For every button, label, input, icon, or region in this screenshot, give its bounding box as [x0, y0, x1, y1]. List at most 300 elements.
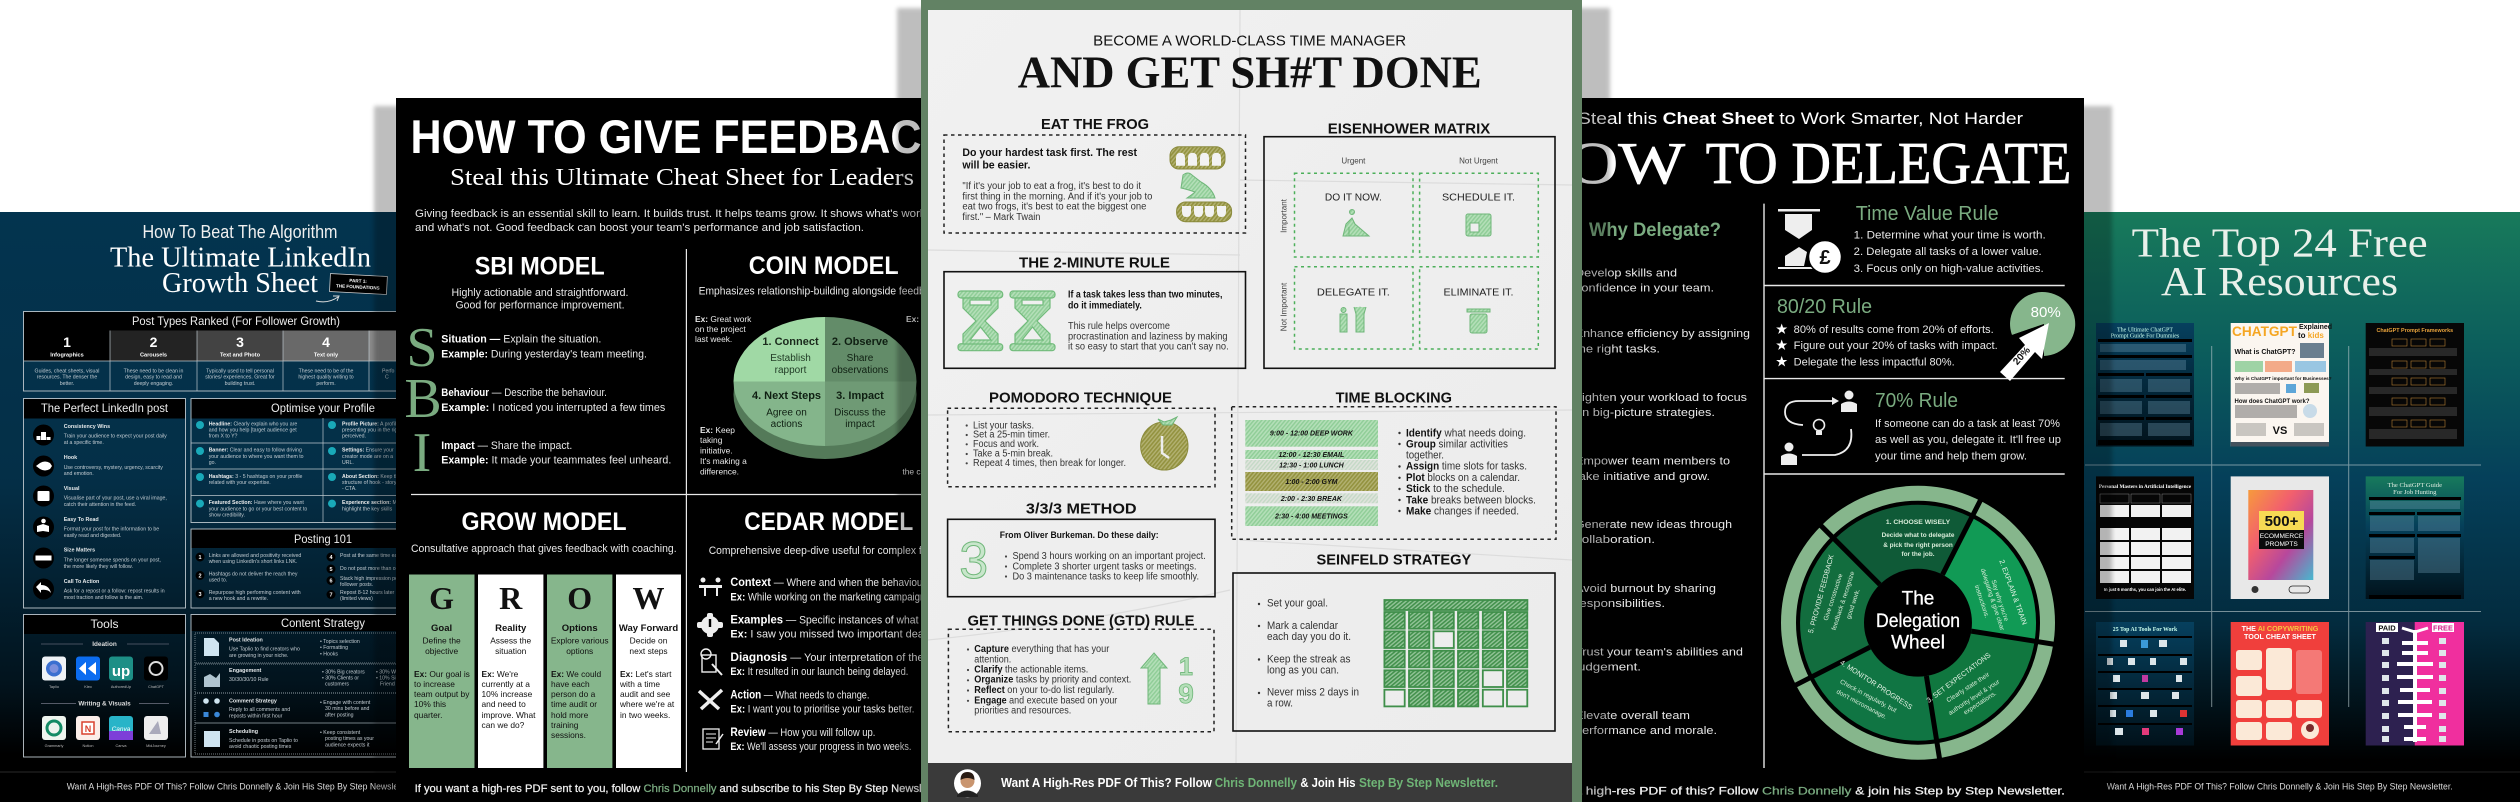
column: reality: Ex: We're	[482, 669, 519, 679]
segment: monitor progress: 4. MONITOR PROGRESS	[1838, 658, 1914, 712]
panel: optimise your profile: Banner: Clear and easy to follow driving	[209, 448, 302, 454]
section: CEDAR model: CEDAR MODEL	[744, 508, 913, 536]
heading: How To Beat The Algorithm: How To Beat The Algorithm	[142, 222, 338, 242]
icon: digging	[1343, 210, 1369, 236]
icons: writing and visuals tools	[42, 716, 168, 740]
section: SBI model: S	[406, 317, 438, 379]
panel: posting 101: 6	[329, 578, 333, 584]
section: why delegate: on big-picture strategies.	[1575, 407, 1715, 419]
panel: content strategy: Engagement	[229, 668, 262, 674]
panel: content strategy: • 30% Big creators	[322, 670, 365, 676]
section: COIN model: initiative.	[700, 446, 733, 456]
thumbnail: ChatGPT guide for job hunting: The ChatGPT Guide	[2388, 482, 2442, 489]
section: why delegate: judgement.	[1574, 662, 1641, 674]
section: eat the frog: first thing in the morning. And if it's your job to	[962, 191, 1153, 202]
subtitle: Steal this Ultimate Cheat Sheet for Leaders	[450, 165, 914, 191]
panel: posting 101: Links are allowed and positivity received	[209, 553, 301, 559]
chart: coin quadrants: impact	[845, 419, 875, 430]
panel: posting 101: Hashtags do not deliver the reach they	[209, 571, 298, 577]
section: why delegate: performance and morale.	[1575, 725, 1717, 737]
panel: tools: ChatGPT	[148, 685, 165, 689]
section: CEDAR model: Comprehensive deep-dive useful for complex feedback.	[709, 545, 964, 557]
panel: optimise your profile	[191, 398, 416, 522]
section: 3/3/3 method: Complete 3 shorter urgent tasks or meetings.	[1012, 561, 1196, 572]
panel: content strategy: reposts within first hour	[229, 714, 283, 720]
section: eisenhower matrix: Urgent	[1341, 156, 1366, 165]
icon: trash can	[1467, 309, 1490, 333]
icon: calendar	[1466, 214, 1491, 236]
icon: arrow and sort digits: 1	[1179, 653, 1193, 681]
panel: content strategy: Use Taplio to find creators who	[229, 647, 300, 653]
section: COIN model: Ex:	[906, 314, 919, 324]
column: reality	[478, 574, 543, 768]
section: seinfeld strategy	[1233, 551, 1555, 731]
chart: schedule blocks: 1:00 - 2:00 GYM	[1285, 479, 1338, 486]
thumbnail: ChatGPT prompt guide: Prompt Guide For Dummies	[2111, 334, 2180, 340]
chart: coin quadrants: actions	[771, 419, 802, 430]
section: seinfeld strategy: long as you can.	[1267, 664, 1339, 676]
thumbnail: ChatGPT explained to kids: What is ChatGPT?	[2234, 349, 2296, 356]
panel: perfect LinkedIn post: The Perfect LinkedIn post	[41, 401, 169, 415]
footer: feedback: If you want a high-res PDF sent to you, follow Chris Donnelly and subscribe to his Step By Step Newsletter.	[415, 783, 947, 795]
section: 80/20 rule	[1776, 292, 2075, 381]
column: options: options	[566, 646, 593, 656]
panel: posting 101: 5	[329, 567, 333, 573]
panel: perfect LinkedIn post: Size Matters	[64, 548, 95, 554]
panel: posting 101: when using LinkedIn's short links LNK.	[209, 559, 297, 565]
panel: tools: Writing & Visuals	[78, 701, 131, 708]
section: time value rule: 3. Focus only on high-value activities.	[1854, 263, 2044, 275]
panel: posting 101: follower posts.	[340, 582, 373, 588]
section: seinfeld strategy: Never miss 2 days in	[1267, 687, 1359, 699]
panel: LinkedIn growth sheet	[0, 212, 419, 802]
thumbnail: ChatGPT explained to kids: How does ChatGPT work?	[2234, 399, 2310, 405]
chart: coin quadrants: Establish	[770, 353, 811, 364]
segment: monitor progress: don't micromanage.	[1835, 688, 1888, 721]
title: The Ultimate LinkedIn Growth Sheet	[110, 242, 371, 299]
panel: post types table: Guides, cheat sheets, visual	[35, 368, 99, 374]
column: goal: Define the	[423, 636, 461, 646]
chart: coin quadrants: Share	[847, 353, 874, 364]
segment: monitor progress: Check in regularly, but	[1838, 678, 1898, 714]
section: seinfeld strategy: a row.	[1267, 698, 1293, 710]
section: GTD rule: priorities and resources.	[974, 706, 1071, 717]
section: why delegate: Elevate overall team	[1575, 710, 1690, 722]
panel: post types table: 4	[322, 334, 330, 350]
panel: optimise your profile: perceived.	[342, 434, 366, 440]
section: eat the frog: Do your hardest task first. The rest	[962, 147, 1137, 159]
panel: content strategy: audience expects it	[325, 742, 370, 748]
footer: newsletter bar: Chris Donnelly	[1215, 775, 1298, 790]
tag: part 1 the foundations: THE FOUNDATIONS	[336, 283, 380, 291]
panel: content strategy: • 30% Clients or	[322, 676, 359, 682]
column: way forward: in two weeks.	[620, 710, 670, 720]
panel: perfect LinkedIn post: Train your audience to expect your post daily	[64, 434, 167, 440]
section: CEDAR model: Ex: I want you to prioritise your tasks better.	[730, 704, 914, 716]
segment: explain and train: 2. EXPLAIN & TRAIN	[1997, 558, 2029, 626]
footer: newsletter bar	[928, 763, 1572, 802]
section: why delegate: Lighten your workload to focus	[1575, 392, 1747, 404]
panel: posting 101: 7	[329, 592, 333, 598]
section: CEDAR model: Context — Where and when the behaviour occurred.	[730, 577, 970, 589]
section: why delegate: Empower team members to	[1575, 456, 1730, 468]
panel: perfect LinkedIn post: Consistency Wins	[64, 424, 110, 430]
thumbnail: 500+ ecommerce prompts: PROMPTS	[2265, 541, 2298, 548]
thumbnail: paid vs free	[2366, 622, 2464, 746]
section: pomodoro technique: List your tasks.	[973, 420, 1034, 431]
panel: tools: AuthoredUp	[111, 685, 131, 689]
thumbnail: 500+ ecommerce prompts: 500+	[2265, 513, 2299, 530]
section: two-minute rule: If a task takes less than two minutes,	[1068, 290, 1223, 301]
section: GTD rule: Reflect on your to-do list regularly.	[974, 685, 1114, 696]
panel: perfect LinkedIn post: catch their attention in the feed.	[64, 502, 136, 508]
chart: delegation wheel: The	[1902, 588, 1934, 610]
chart: delegation wheel: Delegation	[1876, 611, 1960, 632]
panel: posting 101: Post at the same time each day	[340, 553, 413, 559]
title: how to give feedback: HOW TO GIVE FEEDBACK	[410, 111, 952, 164]
section: 70% rule	[1781, 390, 2061, 465]
panel: tools	[24, 614, 186, 757]
column: goal: quarter.	[414, 710, 442, 720]
section: time blocking: Stick to the schedule.	[1406, 483, 1505, 495]
column: options: Explore various	[551, 636, 609, 646]
section: 70% rule: as well as you, delegate it. It'll free up	[1875, 434, 2061, 446]
segment: choose wisely: for the job.	[1901, 551, 1935, 558]
chart: schedule blocks	[1245, 420, 1378, 526]
column: goal: G	[429, 580, 454, 616]
section: GROW model	[409, 508, 681, 768]
column: goal: Ex: Our goal is	[414, 669, 470, 679]
section: GTD rule: Clarify the actionable items.	[974, 664, 1088, 675]
segment: choose wisely: Decide what to delegate	[1882, 532, 1955, 539]
panel: post types table: Carousels	[140, 352, 167, 358]
section: COIN model: COIN MODEL	[749, 252, 899, 280]
panel: content strategy: • 10% Si	[376, 676, 396, 682]
section: SBI model: Example: It made your teammates feel unheard.	[441, 455, 671, 467]
section: why delegate: responsibilities.	[1575, 598, 1665, 610]
panel: optimise your profile: your audience to go or your best content to	[209, 506, 307, 512]
panel: optimise your profile: related with your expertise.	[209, 480, 271, 486]
panel: content strategy: Comment Strategy	[229, 698, 277, 704]
segment: provide feedback: good work.	[1845, 588, 1862, 620]
panel: content strategy: • Hooks	[320, 652, 338, 658]
chart: streak calendar	[1384, 600, 1527, 706]
tag: part 1 the foundations	[330, 274, 387, 295]
column: reality: and need to	[482, 699, 526, 709]
panel: optimise your profile: structure of hook - story	[342, 480, 397, 486]
icon: delegation flow	[1781, 390, 1857, 465]
section: 70% rule: If someone can do a task at least 70%	[1875, 418, 2061, 430]
panel: content strategy: are growing in your niche.	[229, 653, 288, 659]
section: eisenhower matrix: SCHEDULE IT.	[1442, 192, 1515, 204]
section: pomodoro technique: POMODORO TECHNIQUE	[989, 390, 1172, 406]
panel: post types table: perform.	[316, 381, 336, 387]
column: options: O	[567, 580, 592, 616]
panel: content strategy: avoid chaotic posting times	[229, 744, 292, 750]
section: why delegate: the right tasks.	[1575, 344, 1660, 356]
footer: AI resources: Want A High-Res PDF Of This? Follow Chris Donnelly & Join His Step By Step Newsletter.	[2107, 782, 2453, 792]
section: eat the frog: will be easier.	[961, 159, 1030, 171]
title: The Ultimate LinkedIn Growth Sheet: The Ultimate LinkedIn	[110, 242, 371, 274]
footer: delegate: Want a high-res PDF of this? Follow Chris Donnelly & join his Step by Step Newsletter.	[1539, 786, 2065, 798]
section: eisenhower matrix: Important	[1280, 198, 1288, 233]
panel: content strategy: Post Ideation	[229, 638, 263, 644]
chart: coin quadrants: observations	[832, 365, 888, 376]
segment: set expectations: expectations.	[1962, 690, 1998, 716]
section: SBI model: I	[413, 422, 431, 484]
column: way forward: with a time	[619, 679, 660, 689]
section: why delegate: collaboration.	[1575, 534, 1655, 546]
intro text	[415, 208, 941, 234]
icon: tomato clock	[1141, 417, 1188, 470]
panel: tools: Ideation	[92, 641, 117, 648]
section: eisenhower matrix: EISENHOWER MATRIX	[1328, 120, 1490, 137]
panel: optimise your profile: Optimise your Profile	[271, 401, 375, 415]
panel: optimise your profile: Headline: Clearly explain who you are	[209, 422, 297, 428]
section: seinfeld strategy: each day you do it.	[1267, 631, 1351, 643]
panel: perfect LinkedIn post: the more likely they will follow.	[64, 564, 133, 570]
section: GTD rule: Engage and execute based on your	[974, 695, 1118, 706]
section: COIN model	[695, 252, 944, 476]
column: goal: team output by	[414, 689, 470, 699]
panel: post types table: 3	[236, 334, 244, 350]
tag: part 1 the foundations: PART 1:	[349, 278, 367, 284]
panel: post types table: better.	[60, 381, 74, 387]
section: SBI model: SBI MODEL	[475, 252, 605, 280]
segment: explain and train: delegating & give clear	[1979, 568, 2006, 632]
segment: provide feedback: 5. PROVIDE FEEDBACK	[1806, 553, 1836, 634]
thumbnail: ChatGPT explained to kids	[2231, 323, 2332, 446]
chart: 80% pie with 20% arrow: 20%	[2011, 345, 2033, 367]
thumbnail: paid vs free: PAID	[2378, 624, 2396, 632]
section: 3/3/3 method: Do 3 maintenance tasks to keep life smoothly.	[1012, 571, 1199, 582]
section: CEDAR model: Ex: We'll assess your progress in two weeks.	[730, 741, 911, 753]
panel: post types table: Post Types Ranked (For Follower Growth)	[132, 314, 340, 328]
intro text: Giving feedback is an essential skill to learn. It builds trust. It helps teams grow. It shows what's working	[415, 208, 941, 220]
section: why delegate: Avoid burnout by sharing	[1575, 583, 1716, 595]
icons: writing and visuals tools: N	[85, 724, 91, 734]
section: eat the frog: first." – Mark Twain	[962, 212, 1040, 223]
section: why delegate: Develop skills and	[1575, 267, 1677, 279]
arrow: tag pointer	[316, 296, 339, 302]
icons: ideation tools: up	[112, 663, 130, 680]
thumbnail: 25 top AI tools for work	[2096, 622, 2194, 746]
section: 3/3/3 method	[948, 501, 1215, 597]
section: COIN model: the c	[902, 466, 921, 476]
section: SBI model: Example: I noticed you interrupted a few times	[441, 402, 665, 414]
title: top 24 free AI resources: AI Resources	[2161, 258, 2398, 304]
section: two-minute rule: it so easy to start that you can't say no.	[1068, 342, 1229, 353]
section: COIN model: It's making a	[700, 456, 747, 466]
panel: optimise your profile: - CTA.	[342, 486, 357, 492]
section: pomodoro technique	[948, 390, 1215, 487]
segment: set expectations: authority level & your	[1947, 678, 2002, 717]
panel: tools: Taplio	[49, 685, 59, 689]
segment: explain and train	[1973, 558, 2029, 632]
section: GTD rule: attention.	[974, 654, 1011, 665]
chart: 80% pie with 20% arrow: 80%	[2031, 304, 2061, 321]
panel: optimise your profile: go.	[209, 460, 216, 466]
icon: number 3: 3	[959, 532, 988, 590]
thumbnail: AI copywriting tool cheat sheet: THE AI COPYWRITING	[2242, 624, 2319, 633]
thumbnail: 500+ ecommerce prompts	[2231, 476, 2329, 599]
panel: perfect LinkedIn post	[24, 398, 186, 608]
icons: cedar	[697, 578, 723, 749]
panel: content strategy: • Formatting	[320, 645, 348, 651]
section: why delegate: confidence in your team.	[1575, 282, 1714, 294]
thumbnail: ChatGPT guide for job hunting: For Job Hunting	[2393, 489, 2437, 496]
section: SBI model: Impact — Share the impact.	[441, 440, 572, 452]
section: eat the frog: eat two frogs, it's best to eat the biggest one	[962, 202, 1147, 213]
thumbnail: paid vs free: FREE	[2433, 624, 2453, 632]
segment: set expectations: Clearly state their	[1945, 671, 1992, 704]
icons: ideation tools	[42, 656, 168, 680]
chart: schedule blocks: 2:30 - 4:00 MEETINGS	[1274, 514, 1348, 520]
section: COIN model: last week.	[695, 334, 732, 344]
panel: content strategy: 30 mins before and	[325, 706, 370, 712]
section: CEDAR model: Examples — Specific instances of what happened.	[730, 615, 970, 627]
section: SBI model: Behaviour — Describe the behaviour.	[441, 387, 607, 399]
section: GROW model: GROW MODEL	[462, 508, 626, 536]
column: way forward: where we're at	[619, 699, 675, 709]
panel: optimise your profile: URL.	[342, 460, 354, 466]
section: COIN model: Ex: Great work	[695, 314, 752, 324]
thumbnail: 500+ ecommerce prompts: ECOMMERCE	[2260, 533, 2304, 540]
segment: explain and train: Say why you're	[1989, 579, 2010, 623]
panel: posting 101: 4	[329, 555, 333, 561]
section: GTD rule: GET THINGS DONE (GTD) RULE	[968, 613, 1194, 630]
panel: post types table: Typically used to tell personal	[206, 368, 274, 374]
column: reality: Assess the	[490, 636, 532, 646]
section: two-minute rule: This rule helps overcome	[1068, 321, 1170, 332]
section: why delegate: Generate new ideas through	[1575, 519, 1732, 531]
section: 3/3/3 method: Spend 3 hours working on an important project.	[1012, 551, 1206, 562]
column: way forward: audit and see	[620, 689, 671, 699]
panel: post types table: stories/ experiences. Great for	[205, 375, 275, 381]
chart: coin quadrants: Discuss the	[834, 408, 886, 418]
panel: posting 101: 1	[198, 555, 202, 561]
panel: post types table: Infographics	[50, 352, 84, 358]
section: COIN model: Emphasizes relationship-building alongside feedback.	[699, 286, 944, 298]
column: reality: can we do?	[482, 720, 525, 730]
section: time value rule	[1778, 203, 2046, 275]
section: eisenhower matrix: Not Urgent	[1459, 156, 1499, 165]
column: goal: to increase	[414, 679, 455, 689]
panel: content strategy: Friend	[380, 682, 395, 688]
thumbnail: ChatGPT prompt frameworks: ChatGPT Prompt Frameworks	[2376, 328, 2453, 334]
title: and get sh#t done: AND GET SH#T DONE	[1018, 48, 1482, 98]
section: time blocking: Assign time slots for tasks.	[1406, 461, 1527, 473]
chart: schedule blocks: 12:30 - 1:00 LUNCH	[1279, 462, 1345, 470]
title: how to delegate: HOW	[1516, 130, 1685, 196]
column: way forward: Way Forward	[619, 623, 678, 634]
panel: post types table: Text only	[314, 352, 339, 358]
chart: coin quadrants: 1. Connect	[762, 336, 819, 348]
column: goal: Goal	[431, 623, 452, 634]
subtitle: Steal this Cheat Sheet to Work Smarter, Not Harder	[1578, 109, 2023, 128]
section: GTD rule	[948, 613, 1214, 732]
title: how to delegate: TO DELEGATE	[1706, 130, 2071, 196]
panel: post types table: design, easy to read and	[125, 375, 182, 381]
column: way forward: W	[632, 580, 664, 616]
section: CEDAR model: Diagnosis — Your interpretation of the situation.	[730, 652, 970, 664]
section: why delegate	[1574, 220, 1750, 737]
section: 70% rule: 70% Rule	[1875, 390, 1958, 412]
section: why delegate: take initiative and grow.	[1575, 471, 1710, 483]
column: goal	[409, 574, 474, 768]
icons: writing and visuals tools: Canva	[112, 726, 131, 733]
section: CEDAR model: Ex: While working on the marketing campaign last week.	[730, 592, 970, 604]
column: reality: R	[499, 580, 523, 616]
section: eisenhower matrix: ELIMINATE IT.	[1444, 287, 1514, 299]
chart: delegation wheel	[1788, 493, 2056, 761]
panel: optimise your profile: presenting you in the right way	[342, 428, 413, 434]
section: time blocking: TIME BLOCKING	[1336, 390, 1452, 406]
chart: delegation wheel: Wheel	[1891, 633, 1945, 654]
section: GTD rule: Capture everything that has your	[974, 644, 1110, 655]
panel: tools: Grammarly	[45, 744, 63, 748]
panel: content strategy: posting times as your	[325, 736, 374, 742]
panel: optimise your profile: Profile Picture: A profile picture	[342, 422, 416, 428]
panel: tools: Tools	[90, 617, 119, 631]
column: reality: situation	[495, 646, 527, 656]
section: time blocking	[1232, 390, 1556, 539]
panel: post types table: 1	[63, 334, 71, 350]
section: COIN model: Ex: Keep	[700, 425, 735, 435]
section: SBI model: Situation — Explain the situation.	[441, 334, 601, 346]
segment: choose wisely	[1882, 519, 1955, 558]
panel: post types table	[24, 312, 405, 391]
panel: optimise your profile: and how you help [target audience get	[209, 428, 297, 434]
section: CEDAR model: Ex: I saw you missed two important deadlines.	[730, 629, 955, 641]
panel: posting 101: (limited views)	[340, 596, 373, 602]
panel: perfect LinkedIn post: Visual	[64, 486, 80, 492]
panel: posting 101: Repurpose high performing content with	[209, 590, 301, 596]
section: CEDAR model	[697, 508, 970, 753]
section: pomodoro technique: Set a 25-min timer.	[973, 430, 1050, 441]
section: SBI model: Example: During yesterday's team meeting.	[441, 349, 647, 361]
section: time value rule: 2. Delegate all tasks of a lower value.	[1854, 246, 2042, 258]
segment: explain and train: instructions.	[1973, 584, 1990, 619]
panel: posting 101: Repost 8-12 hours later	[340, 590, 394, 596]
section: two-minute rule	[944, 255, 1246, 368]
panel: posting 101: Do not post more than once a day	[340, 566, 419, 572]
panel: content strategy: Reply to all comments and	[229, 707, 290, 713]
panel: perfect LinkedIn post: easily read and digested.	[64, 533, 121, 539]
thumbnail: ChatGPT explained to kids: VS	[2273, 425, 2287, 437]
thumbnail: ChatGPT explained to kids: Explained	[2299, 324, 2332, 331]
thumbnail: AI copywriting tool cheat sheet	[2231, 622, 2329, 746]
segment: choose wisely: 1. CHOOSE WISELY	[1886, 519, 1951, 526]
section: time value rule: Time Value Rule	[1856, 203, 1999, 225]
segment: choose wisely: & pick the right person	[1883, 542, 1953, 549]
column: options	[547, 574, 612, 768]
thumbnail: ChatGPT prompt guide: The Ultimate ChatGPT	[2117, 328, 2173, 334]
panel: optimise your profile: Hashtags: 3 - 5 hashtags on your profile	[209, 474, 303, 480]
panel: content strategy: • Topics selection	[320, 639, 360, 645]
panel: post types table: C	[385, 375, 389, 381]
panel: post types table: resources. The denser the	[37, 375, 97, 381]
panel: content strategy: Scheduling	[229, 729, 258, 735]
section: pomodoro technique: Take a 5-min break.	[973, 449, 1053, 460]
panel: how to give feedback	[396, 98, 970, 802]
thumbnail: 25 top AI tools for work: 25 Top AI Tools For Work	[2113, 627, 2178, 633]
chart: schedule blocks: 12:00 - 12:30 EMAIL	[1279, 452, 1344, 459]
thumbnail: ChatGPT guide for job hunting	[2366, 476, 2464, 599]
section: why delegate: Enhance efficiency by assigning	[1575, 328, 1750, 340]
icon: hourglass and pound	[1778, 209, 1842, 274]
section: two-minute rule: procrastination and laziness by making	[1068, 331, 1228, 342]
